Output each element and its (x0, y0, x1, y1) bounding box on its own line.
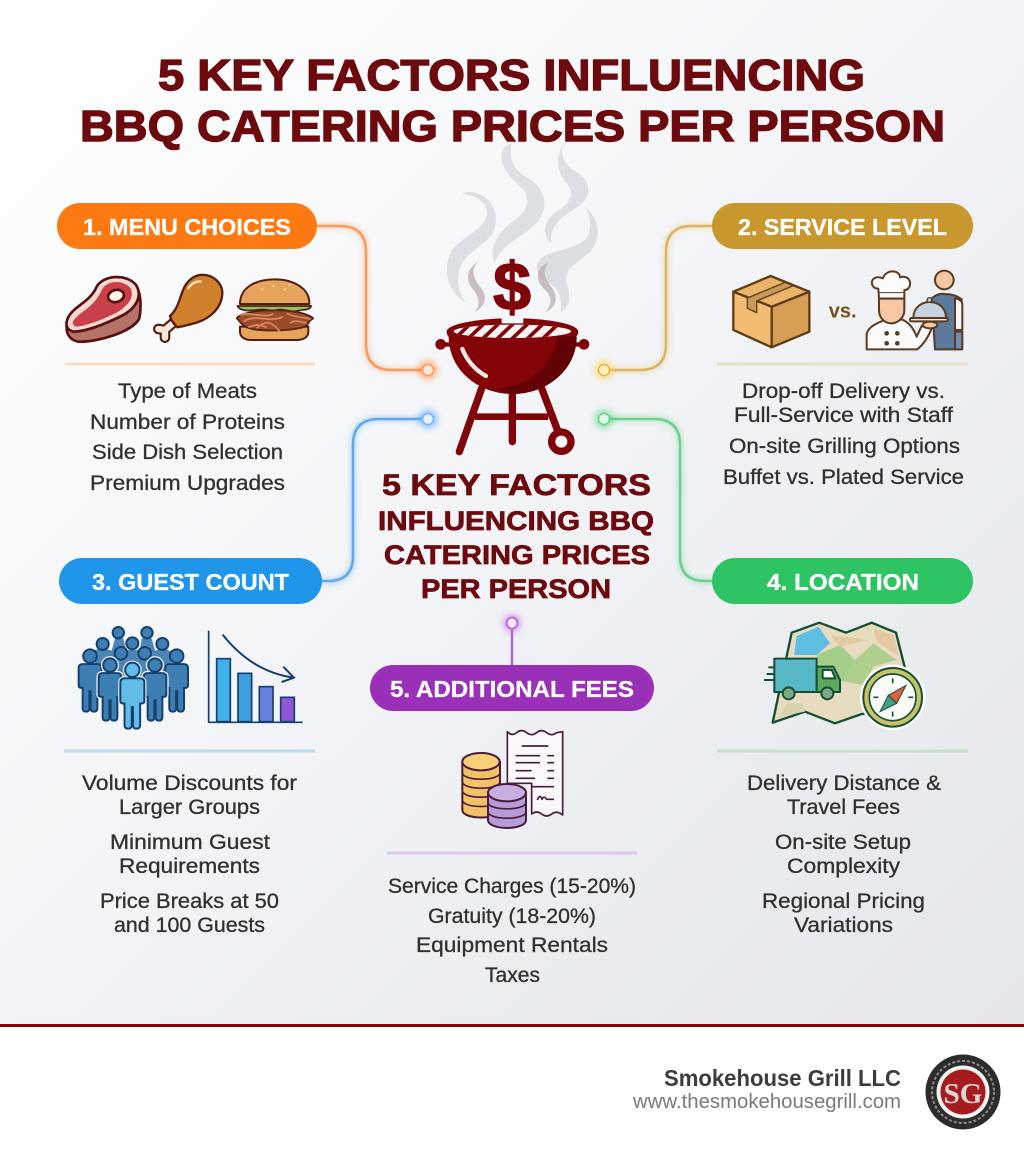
list: location: Travel Fees (787, 796, 900, 819)
grate (454, 325, 571, 338)
logo (926, 1054, 1000, 1130)
panel: additional fees (370, 665, 654, 987)
falling bar chart (209, 631, 303, 722)
badge: menu choices (57, 203, 317, 249)
list: guest count: Requirements (119, 855, 260, 878)
panel: location (712, 558, 973, 937)
badge: guest count: 3. GUEST COUNT (92, 569, 289, 595)
footer (0, 1024, 1024, 1154)
list: location: Variations (794, 914, 893, 937)
icon: grill with dollar sign (435, 249, 589, 452)
connector: additional fees (503, 614, 521, 665)
icon: crowd and falling bar chart (79, 627, 303, 729)
cloche (923, 322, 937, 328)
list: location: Delivery Distance & (747, 772, 941, 795)
delivery box (733, 276, 809, 347)
burger (237, 279, 313, 340)
panel: guest count (59, 558, 322, 937)
list: service level: Drop-off Delivery vs. (742, 380, 945, 403)
list: menu choices (90, 380, 285, 495)
icon: smoke (447, 143, 598, 312)
icon: small smoke wisps (468, 262, 556, 312)
chef (867, 271, 948, 349)
gold coin stack (462, 762, 500, 817)
list: guest count: Price Breaks at 50 (100, 890, 279, 913)
bowl (449, 337, 577, 394)
lid rim and handles (435, 339, 446, 350)
icon: map, truck and compass (764, 623, 925, 730)
list: menu choices: Premium Upgrades (90, 472, 285, 495)
list: menu choices: Side Dish Selection (92, 441, 283, 464)
badge: service level: 2. SERVICE LEVEL (738, 214, 947, 240)
receipt (507, 731, 563, 816)
list: menu choices: Number of Proteins (90, 411, 285, 434)
list: additional fees: Service Charges (15-20%) (388, 875, 636, 898)
map (773, 623, 907, 723)
list: additional fees: Equipment Rentals (416, 934, 608, 957)
waiter (932, 271, 962, 349)
dollar sign: $ (493, 249, 531, 325)
badge: location (712, 558, 973, 604)
purple coin stack (488, 793, 526, 828)
connector: location (595, 410, 712, 581)
list: location: Regional Pricing (762, 890, 925, 913)
list: location: Complexity (787, 855, 901, 878)
steak (67, 277, 141, 342)
connector: guest count (322, 410, 437, 581)
truck (764, 659, 840, 699)
center heading: CATERING PRICES (384, 540, 650, 570)
title (80, 51, 945, 151)
panel: service level (712, 203, 973, 489)
title: BBQ CATERING PRICES PER PERSON (80, 102, 945, 151)
list: service level (723, 380, 964, 489)
list: service level: Full-Service with Staff (734, 404, 953, 427)
website: www.thesmokehousegrill.com (632, 1091, 901, 1113)
connector: service level (595, 226, 712, 379)
compass (860, 665, 925, 730)
list: service level: Buffet vs. Plated Service (723, 466, 964, 489)
bowl highlight (462, 349, 486, 376)
list: guest count: Larger Groups (119, 796, 260, 819)
panel: menu choices (57, 203, 317, 495)
badge: service level (712, 203, 973, 249)
vs label: vs. (829, 301, 857, 323)
icon: coins and receipt (462, 731, 563, 828)
list: location (747, 772, 941, 937)
icon: box vs chef and waiter (733, 271, 962, 349)
drumstick (158, 275, 222, 338)
logo: SG (944, 1078, 982, 1110)
badge: location: 4. LOCATION (767, 569, 919, 595)
list: location: On-site Setup (775, 831, 911, 854)
list: guest count: and 100 Guests (114, 914, 265, 937)
center heading: PER PERSON (421, 574, 611, 604)
center heading: 5 KEY FACTORS (382, 469, 651, 502)
list: additional fees (388, 875, 636, 987)
list: guest count: Minimum Guest (110, 831, 270, 854)
center heading (378, 469, 654, 604)
list: guest count: Volume Discounts for (82, 772, 297, 795)
badge: menu choices: 1. MENU CHOICES (83, 214, 291, 240)
badge: additional fees (370, 665, 654, 711)
badge: guest count (59, 558, 322, 604)
connector: menu choices (317, 226, 437, 379)
center heading: INFLUENCING BBQ (378, 506, 654, 536)
crowd (79, 627, 188, 729)
list: additional fees: Gratuity (18-20%) (428, 905, 596, 928)
list: guest count (82, 772, 297, 937)
legs (459, 388, 560, 452)
list: menu choices: Type of Meats (118, 380, 257, 403)
icon: steak, drumstick and burger (67, 275, 313, 342)
list: service level: On-site Grilling Options (729, 435, 960, 458)
badge: additional fees: 5. ADDITIONAL FEES (390, 676, 634, 702)
title: 5 KEY FACTORS INFLUENCING (158, 51, 865, 100)
company name: Smokehouse Grill LLC (664, 1065, 901, 1091)
list: additional fees: Taxes (485, 964, 540, 987)
